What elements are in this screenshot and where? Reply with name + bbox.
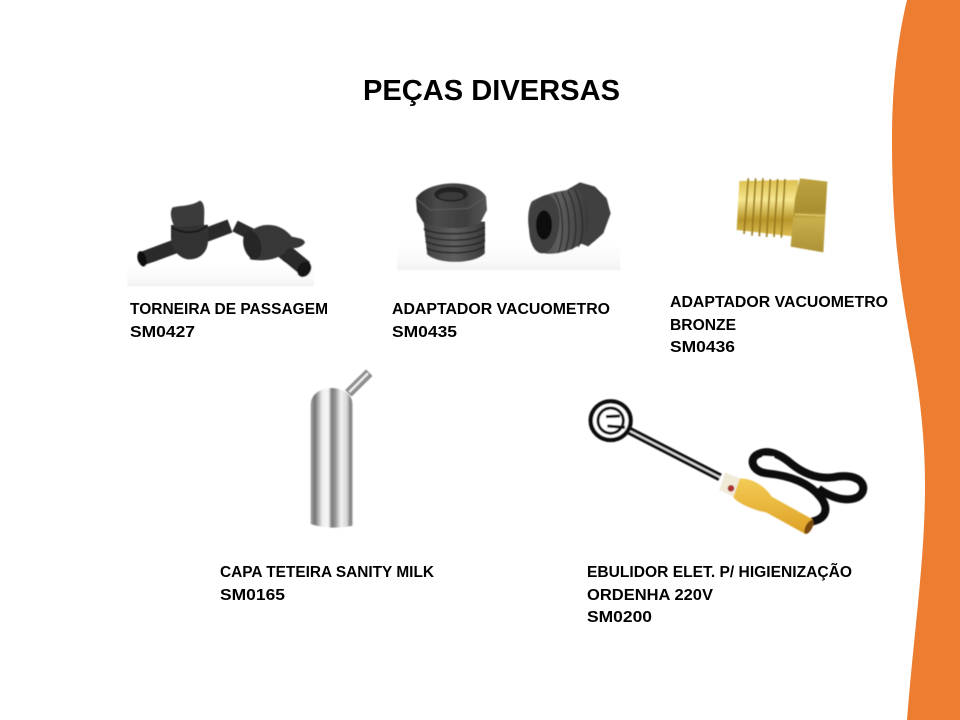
title: PEÇAS DIVERSAS	[363, 75, 620, 107]
panel: ebulidor	[587, 401, 863, 626]
label: ebulidor: SM0200	[587, 609, 652, 626]
label: adaptador vacuometro	[392, 301, 610, 341]
icon: bronze adaptor photo	[737, 178, 827, 252]
label: torneira de passagem: TORNEIRA DE PASSAGEM	[130, 301, 328, 318]
panel: torneira de passagem	[127, 201, 328, 341]
label: torneira de passagem	[130, 301, 328, 341]
label: adaptador vacuometro bronze: BRONZE	[670, 317, 736, 334]
label: capa teteira	[220, 564, 434, 604]
label: adaptador vacuometro: SM0435	[392, 324, 457, 341]
label: adaptador vacuometro bronze: ADAPTADOR VACUOMETRO	[670, 294, 888, 311]
label: adaptador vacuometro bronze	[670, 294, 888, 356]
label: ebulidor	[587, 561, 852, 626]
label: adaptador vacuometro: ADAPTADOR VACUOMETRO	[392, 301, 610, 318]
label: capa teteira: SM0165	[220, 587, 285, 604]
panel: adaptador vacuometro bronze	[670, 178, 888, 356]
icon: torneira photo	[127, 201, 314, 286]
icon: ebulidor photo	[591, 401, 863, 535]
panel: adaptador vacuometro	[392, 182, 620, 341]
label: ebulidor: ORDENHA 220V	[587, 587, 713, 604]
label: torneira de passagem: SM0427	[130, 324, 195, 341]
label: ebulidor: EBULIDOR ELET. P/ HIGIENIZAÇÃO	[587, 561, 852, 581]
panel: capa teteira	[220, 373, 434, 604]
icon: capa teteira photo	[311, 373, 369, 528]
orange side band	[892, 0, 960, 720]
label: capa teteira: CAPA TETEIRA SANITY MILK	[220, 564, 434, 581]
label: adaptador vacuometro bronze: SM0436	[670, 339, 735, 356]
icon: adaptador photo	[397, 182, 620, 270]
